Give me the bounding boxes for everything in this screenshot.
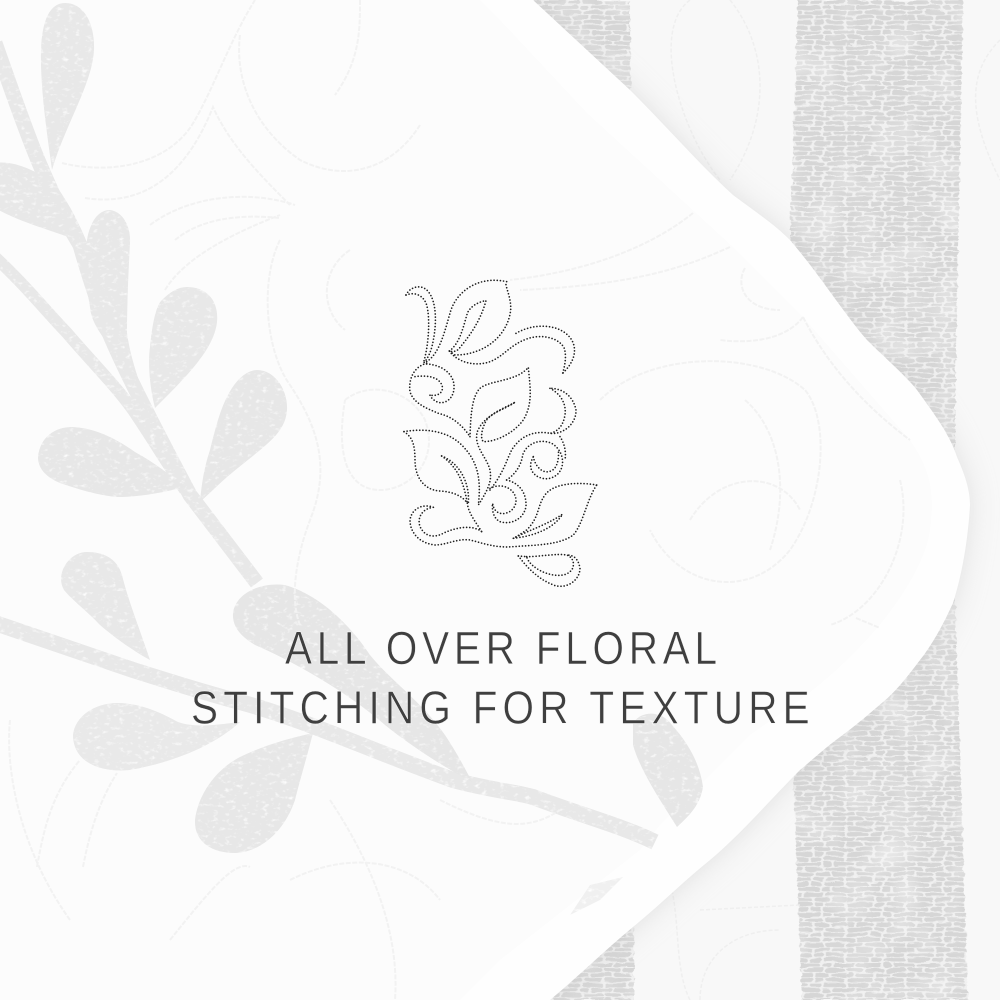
printed floral branch on the quilt [0,3,703,915]
background stitching on the underlying fabric [671,0,1000,1000]
icon: dotted floral stitching motif [404,280,597,586]
leaf: right [200,370,287,502]
leaf: middle [149,287,217,408]
heading text: STITCHING FOR TEXTURE [191,683,810,734]
leaf sliver near hem [570,877,623,915]
leaf: bottom left [73,703,240,770]
leaf: centre under text [233,584,472,782]
printed grey stripes on the underlying fabric [530,0,968,1000]
stems [0,43,655,842]
leaf: lower left single [61,552,150,660]
leaf: upper middle [86,210,143,393]
leaf: top [41,3,94,170]
leaf: bottom centre [195,733,313,853]
heading text [191,624,810,734]
leaf: right under text [633,714,703,827]
leaf: left [0,163,88,245]
leaf: lower left of branch [38,427,186,497]
heading text: ALL OVER FLORAL [285,624,717,675]
